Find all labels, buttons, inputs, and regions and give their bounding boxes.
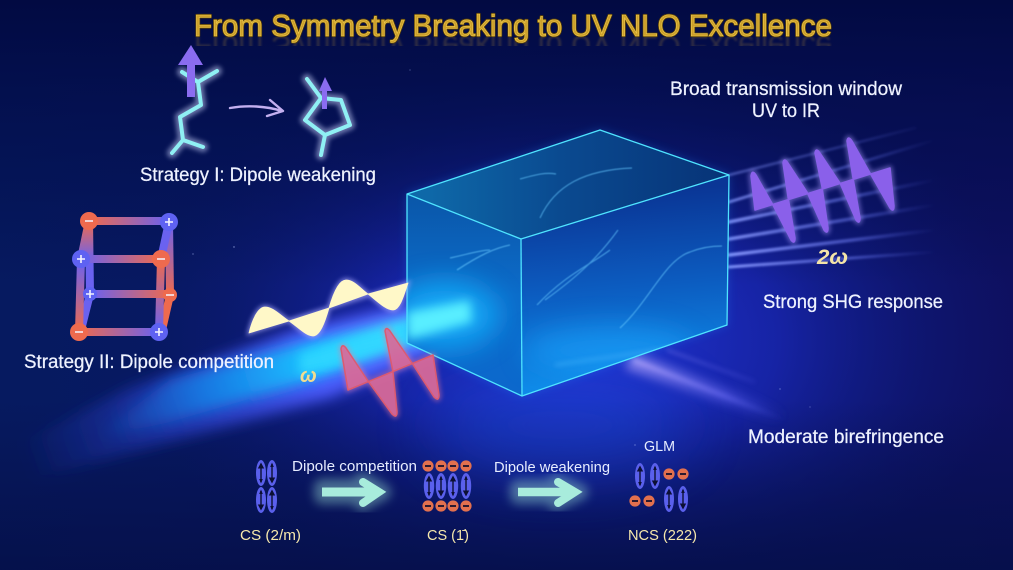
structure: CS (-1) dipoles and anions [422, 460, 472, 512]
title: From Symmetry Breaking to UV NLO Excellence [194, 8, 832, 43]
label: omega: ω [300, 365, 317, 387]
label: CS (-1): CS (1̄) [427, 528, 469, 544]
label: strategy I: Strategy I: Dipole weakening [140, 164, 376, 186]
strategy II: dipole lattice [70, 212, 178, 341]
crystal: glow [407, 130, 729, 396]
label: GLM: GLM [644, 439, 675, 455]
label: broad transmission window: UV to IR [752, 101, 820, 122]
wave: fundamental red [341, 328, 439, 416]
crystal: right face [521, 175, 729, 396]
crystal: left face [407, 194, 522, 396]
label: two omega: 2ω [816, 246, 848, 269]
crystal: top face [407, 130, 729, 239]
label: moderate birefringence: Moderate birefringence [748, 427, 944, 448]
label: broad transmission window [670, 79, 902, 122]
label: strategy II: Strategy II: Dipole competition [24, 351, 274, 373]
light beam entering crystal [15, 290, 475, 485]
dipole arrow: large [178, 45, 203, 97]
arrow: dipole weakening [518, 482, 580, 503]
label: strong SHG response: Strong SHG response [763, 292, 943, 313]
arrow: chain to ring [230, 100, 283, 116]
label: CS (2/m): CS (2/m) [240, 528, 301, 544]
crystal block [390, 130, 729, 396]
strategy I: ring molecule [305, 77, 350, 155]
crystal: internal glow and veins [390, 168, 722, 374]
strategy I: chain molecule [172, 45, 217, 153]
label: dipole competition: Dipole competition [292, 459, 417, 475]
structure: CS (2/m) dipoles [256, 460, 277, 513]
label: broad transmission window: Broad transmission window [670, 79, 902, 100]
structure: NCS (222) dipoles and anions [629, 463, 689, 512]
title: From Symmetry Breaking to UV NLO Excellence [194, 29, 832, 64]
wave: second harmonic purple [751, 138, 894, 242]
crystal: edges [407, 130, 729, 396]
title: From Symmetry Breaking to UV NLO Excellence [194, 8, 832, 43]
wave: fundamental yellow [249, 280, 408, 336]
dipole arrow: small [319, 77, 332, 109]
arrow: dipole competition [322, 480, 383, 503]
label: NCS (222): NCS (222) [628, 528, 697, 544]
label: dipole weakening: Dipole weakening [494, 460, 610, 476]
rays: second harmonic output [625, 128, 935, 424]
